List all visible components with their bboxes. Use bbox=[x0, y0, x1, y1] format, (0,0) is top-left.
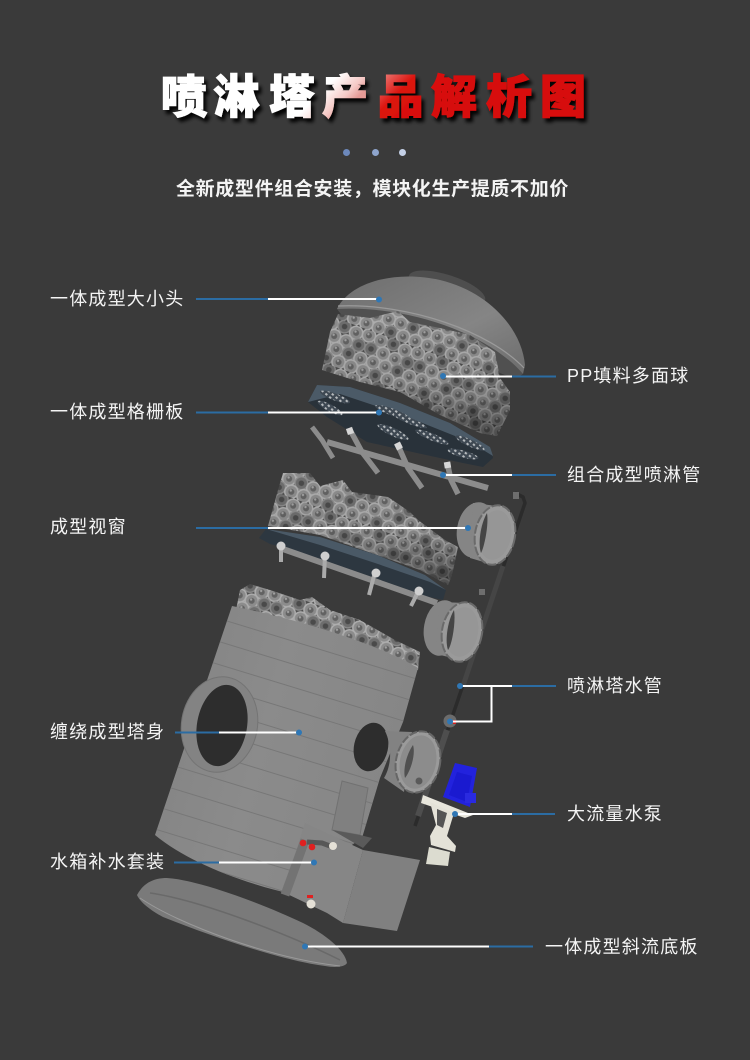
PP ball packing upper bbox=[322, 311, 510, 436]
spray pipe label text: 组合成型喷淋管 bbox=[567, 465, 701, 485]
title bbox=[161, 71, 586, 123]
grating plate bbox=[308, 385, 493, 467]
vertical riser bbox=[332, 781, 368, 835]
water pipe valve bbox=[444, 714, 456, 728]
water pipe bbox=[415, 492, 525, 826]
high flow pump bbox=[421, 763, 477, 866]
decorative three dots bbox=[343, 149, 406, 156]
small opening and flange bbox=[349, 720, 446, 797]
callout: PP填料多面球 bbox=[440, 366, 689, 386]
body label text: 缠绕成型塔身 bbox=[50, 722, 165, 742]
PP ball packing middle bbox=[268, 473, 458, 585]
large side opening bbox=[174, 671, 265, 778]
water tank bbox=[283, 823, 420, 931]
title: 喷淋塔产 bbox=[161, 71, 368, 123]
view window ring upper bbox=[452, 499, 520, 568]
water pipe label text: 喷淋塔水管 bbox=[567, 676, 663, 696]
title: 品解析图 bbox=[378, 71, 586, 123]
tank refill kit bbox=[285, 840, 337, 908]
pump label text: 大流量水泵 bbox=[567, 804, 663, 824]
label text: 一体成型大小头 bbox=[50, 289, 184, 309]
callout: 水箱补水套装 bbox=[50, 852, 317, 872]
middle grating plate bbox=[259, 529, 446, 600]
combined spray pipes bbox=[312, 427, 488, 494]
PP ball packing lower bbox=[232, 584, 420, 670]
callout: 一体成型斜流底板 bbox=[302, 937, 699, 957]
exploded tower illustration bbox=[137, 263, 525, 967]
subtitle: 全新成型件组合安装，模块化生产提质不加价 bbox=[176, 177, 569, 200]
dome head bbox=[337, 263, 525, 377]
callout: 成型视窗 bbox=[50, 517, 471, 537]
callout: 一体成型大小头 bbox=[50, 289, 382, 309]
callout: 喷淋塔水管 bbox=[447, 676, 663, 724]
sloped bottom plate bbox=[137, 878, 347, 967]
callout: 一体成型格栅板 bbox=[50, 402, 382, 422]
middle spray pipes bbox=[276, 542, 437, 606]
wound tower body bbox=[155, 606, 418, 892]
callout: 组合成型喷淋管 bbox=[440, 465, 701, 485]
callout: 缠绕成型塔身 bbox=[50, 722, 302, 742]
view window ring lower bbox=[419, 597, 487, 665]
PP label text: PP填料多面球 bbox=[567, 366, 689, 386]
bottom plate label text: 一体成型斜流底板 bbox=[545, 937, 699, 957]
grating label text: 一体成型格栅板 bbox=[50, 402, 184, 422]
window label text: 成型视窗 bbox=[50, 517, 127, 537]
callout: 大流量水泵 bbox=[452, 804, 663, 824]
kit label text: 水箱补水套装 bbox=[50, 852, 165, 872]
